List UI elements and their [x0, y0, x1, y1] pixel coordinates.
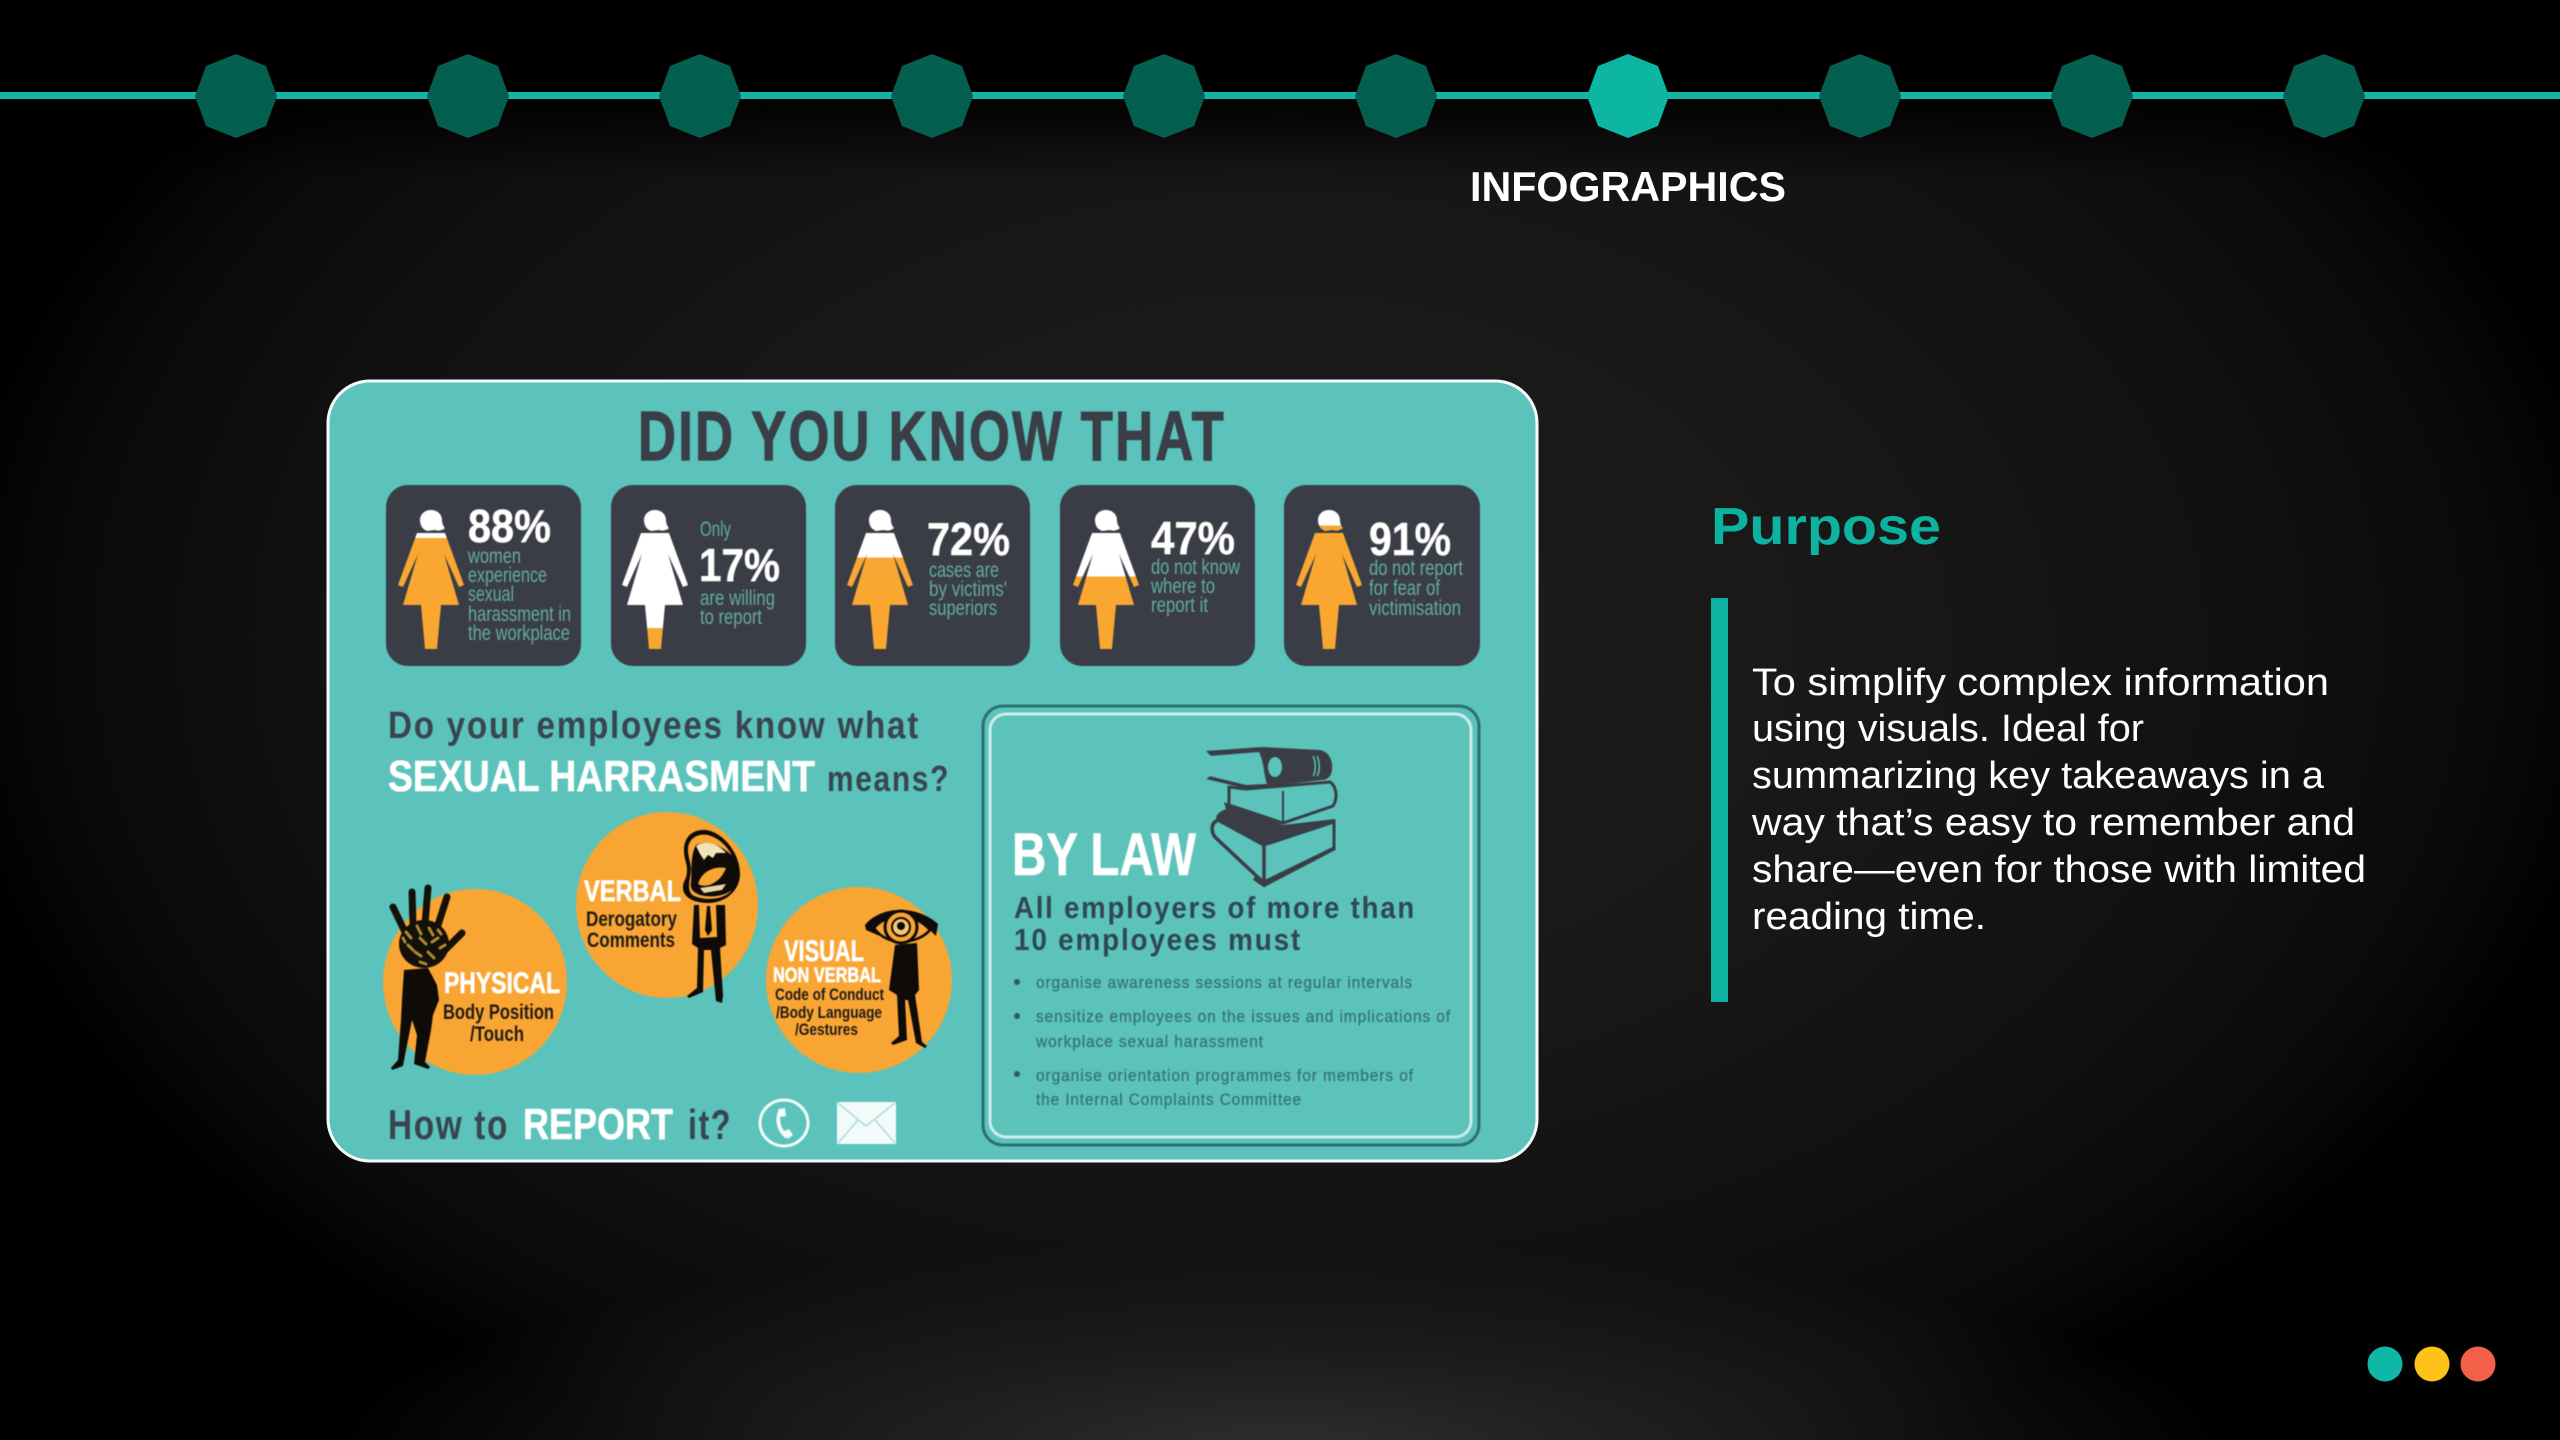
category: visual	[766, 887, 952, 1073]
stat text 88%: the workplace	[468, 622, 570, 645]
stat text 88%: 88%	[468, 500, 551, 552]
question heading	[388, 705, 950, 801]
stat tile: 91%	[1284, 485, 1480, 666]
stat text 91%: 91%	[1369, 513, 1451, 565]
category text physical: /Touch	[470, 1023, 524, 1046]
stat text 91%: victimisation	[1369, 597, 1461, 620]
icon: woman 91%	[1296, 510, 1362, 649]
stat text 72%: superiors	[929, 597, 997, 620]
stat text 88%: sexual	[468, 583, 514, 606]
stat text 88%: harassment in	[468, 603, 571, 626]
icon: stack of books	[1206, 747, 1336, 885]
bullet list: workplace sexual harassment	[1035, 1032, 1264, 1051]
category: verbal	[576, 812, 758, 1003]
stat tile: 47%	[1060, 485, 1255, 666]
icon: man with hand head	[391, 888, 462, 1070]
category text verbal: Comments	[587, 929, 675, 952]
stat text 91%	[1369, 513, 1463, 620]
timeline node 10	[2283, 54, 2365, 138]
stat text 88%: women	[467, 545, 521, 568]
stat text 47%	[1150, 512, 1241, 617]
icon: phone	[760, 1100, 808, 1146]
stat text 72%: 72%	[927, 513, 1010, 565]
by law subheading: 10 employees must	[1014, 922, 1302, 957]
timeline	[0, 54, 2560, 138]
report prompt: it?	[688, 1101, 732, 1148]
timeline node 6	[1355, 54, 1437, 138]
icon: woman 88%	[398, 510, 464, 649]
purpose description: way that’s easy to remember and	[1751, 802, 2355, 844]
icon: woman 47%	[1073, 510, 1139, 649]
stat text 47%: report it	[1151, 594, 1208, 617]
question heading: SEXUAL HARRASMENT	[388, 752, 815, 801]
timeline node 8	[1819, 54, 1901, 138]
bullet list	[1014, 973, 1451, 1109]
panel: infographic card	[328, 381, 1537, 1161]
purpose description: To simplify complex information	[1752, 662, 2329, 704]
stat text 47%: do not know	[1151, 556, 1241, 579]
stat text 72%	[927, 513, 1010, 620]
purpose description: using visuals. Ideal for	[1752, 708, 2144, 750]
stat text 17%: are willing	[700, 587, 775, 610]
stat text 17%	[699, 518, 780, 629]
card heading: DID YOU KNOW THAT	[638, 397, 1226, 475]
timeline node 5	[1123, 54, 1205, 138]
category: physical	[383, 888, 567, 1075]
category text visual: NON VERBAL	[773, 964, 881, 987]
bullet list: the Internal Complaints Committee	[1036, 1090, 1302, 1109]
stat tile: 17%	[611, 485, 806, 666]
stat text 91%: do not report	[1369, 557, 1463, 580]
by law heading: BY LAW	[1012, 821, 1196, 888]
bullet list: sensitize employees on the issues and implications of	[1036, 1007, 1451, 1026]
stat text 17%: 17%	[699, 539, 780, 591]
stat text 88%: experience	[468, 564, 547, 587]
active step label: INFOGRAPHICS	[1470, 163, 1786, 210]
category text physical	[443, 967, 560, 1046]
icon: man with eye head	[865, 910, 938, 1048]
icon: envelope	[837, 1102, 896, 1144]
purpose heading: Purpose	[1711, 498, 1941, 556]
stat text 72%: by victims'	[929, 578, 1007, 601]
category text verbal: VERBAL	[584, 875, 681, 908]
stat text 47%: where to	[1150, 575, 1215, 598]
icon: woman 17%	[622, 510, 688, 649]
stat text 88%	[467, 500, 571, 645]
report prompt	[388, 1100, 732, 1149]
category text physical: Body Position	[443, 1001, 554, 1024]
stat text 47%: 47%	[1151, 512, 1235, 564]
category text visual: /Gestures	[795, 1020, 858, 1039]
category text visual: Code of Conduct	[775, 985, 884, 1004]
stat tile: 72%	[835, 485, 1030, 666]
timeline node 9	[2051, 54, 2133, 138]
category text visual: /Body Language	[776, 1003, 882, 1022]
bullet list: organise awareness sessions at regular intervals	[1036, 973, 1413, 992]
accent bar	[1711, 598, 1728, 1002]
category text verbal	[584, 875, 681, 952]
by law subheading	[1014, 890, 1416, 957]
category text visual: VISUAL	[784, 935, 864, 968]
icon: man with mouth head	[683, 830, 740, 1003]
stat text 91%: for fear of	[1369, 577, 1440, 600]
purpose description: share—even for those with limited	[1752, 849, 2366, 891]
timeline node 1	[195, 54, 277, 138]
bullet list: organise orientation programmes for members of	[1036, 1066, 1414, 1085]
timeline node 4	[891, 54, 973, 138]
category text physical: PHYSICAL	[444, 967, 560, 1000]
purpose description: reading time.	[1752, 896, 1986, 938]
decorative colour dots	[2368, 1346, 2496, 1382]
purpose description	[1751, 662, 2366, 938]
report prompt: REPORT	[523, 1100, 673, 1149]
question heading: means?	[827, 758, 950, 799]
purpose description: summarizing key takeaways in a	[1752, 755, 2325, 797]
timeline node 7 active	[1587, 54, 1669, 138]
stat text 17%: to report	[700, 606, 762, 629]
by law subheading: All employers of more than	[1014, 890, 1416, 925]
timeline node 2	[427, 54, 509, 138]
icon: woman 72%	[847, 510, 913, 649]
stat text 17%: Only	[700, 518, 731, 541]
stat text 72%: cases are	[929, 559, 999, 582]
report prompt: How to	[388, 1101, 509, 1148]
category text verbal: Derogatory	[586, 908, 677, 931]
stat tile: 88%	[386, 485, 581, 666]
category text visual	[773, 935, 884, 1039]
timeline node 3	[659, 54, 741, 138]
panel: by law box	[983, 706, 1479, 1145]
question heading: Do your employees know what	[388, 705, 920, 747]
